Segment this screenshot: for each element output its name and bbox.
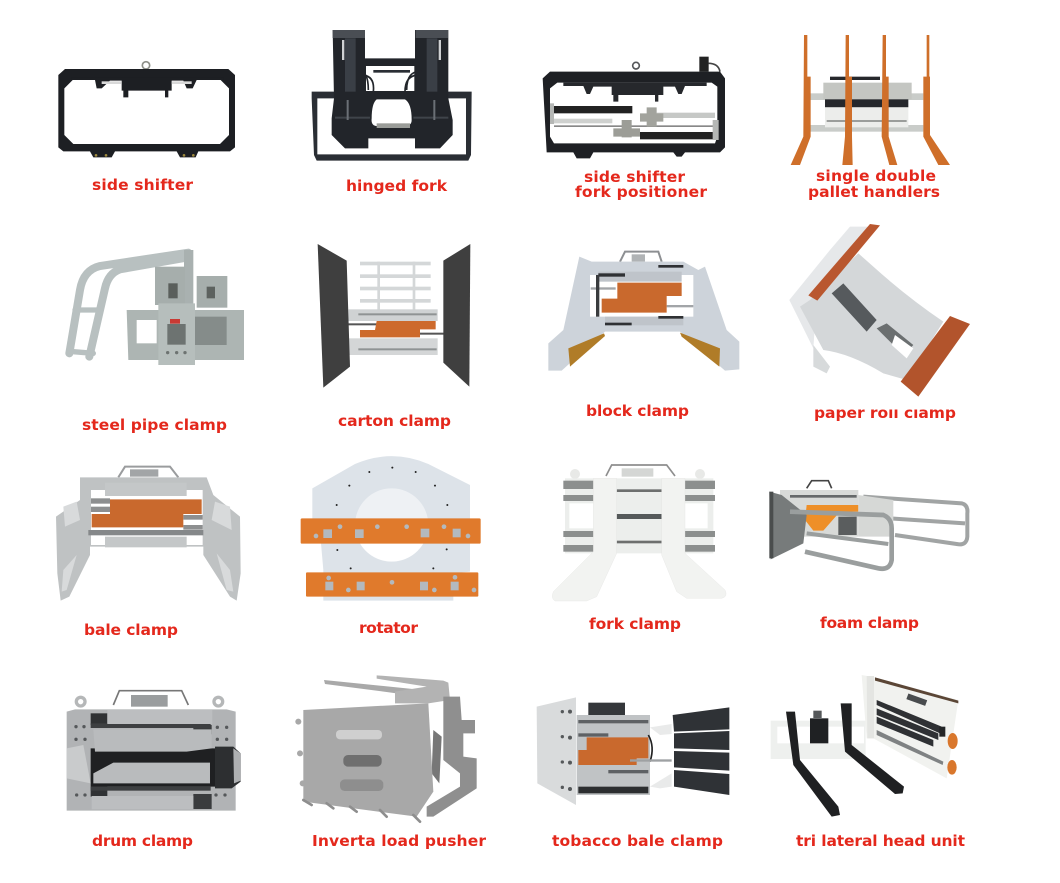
- label: hinged fork: hinged fork: [346, 177, 448, 195]
- label: steel pipe clamp: steel pipe clamp: [82, 416, 227, 434]
- panel: steel pipe clamp: [69, 250, 244, 434]
- image: drum clamp: [67, 691, 241, 811]
- panel: paper roll clamp: [789, 224, 970, 422]
- label: drum clamp: drum clamp: [92, 832, 193, 850]
- label: carton clamp: carton clamp: [338, 412, 451, 430]
- panel: side shifter fork positioner: [543, 57, 725, 201]
- image: hinged fork: [312, 30, 472, 161]
- image: fork clamp: [552, 465, 726, 601]
- label: Inverta load pusher: Inverta load pusher: [312, 832, 486, 850]
- label: tobacco bale clamp: tobacco bale clamp: [552, 832, 723, 850]
- image: paper roll clamp: [789, 224, 970, 397]
- label: fork clamp: fork clamp: [589, 615, 681, 633]
- panel: rotator: [301, 456, 481, 637]
- label: side shifter fork positioner (two lines): fork positioner: [575, 183, 707, 201]
- label: tri lateral head unit: tri lateral head unit: [796, 832, 966, 850]
- panel: Inverta load pusher: [295, 675, 486, 850]
- image: Inverta load pusher: [295, 675, 477, 822]
- image: tobacco bale clamp: [537, 697, 729, 805]
- image: bale clamp: [56, 467, 241, 601]
- panel: side shifter: [58, 62, 235, 194]
- label: foam clamp: foam clamp: [820, 614, 919, 632]
- image: rotator: [301, 456, 481, 601]
- label: single double pallet handlers (two lines): single double: [816, 167, 936, 185]
- label: single double pallet handlers (two lines): [808, 167, 940, 201]
- panel: hinged fork: [312, 30, 472, 195]
- panel: tri lateral head unit: [771, 675, 966, 850]
- label: side shifter: side shifter: [92, 176, 193, 194]
- label: side shifter fork positioner (two lines): side shifter: [584, 168, 685, 186]
- panel: tobacco bale clamp: [537, 697, 729, 850]
- label: paper roll clamp: paper roıı cıamp: [814, 404, 956, 422]
- label: single double pallet handlers (two lines): pallet handlers: [808, 183, 940, 201]
- image: side shifter with fork positioner: [543, 57, 725, 158]
- panel: drum clamp: [67, 691, 241, 850]
- image: side shifter frame: [58, 62, 235, 157]
- label: block clamp: block clamp: [586, 402, 689, 420]
- image: pallet handler: [791, 35, 950, 165]
- label: side shifter fork positioner (two lines): [575, 168, 707, 201]
- image: foam clamp: [769, 481, 967, 569]
- panel: carton clamp: [318, 244, 470, 430]
- panel: bale clamp: [56, 467, 241, 639]
- image: steel pipe clamp: [69, 250, 244, 365]
- image: carton clamp: [318, 244, 470, 388]
- label: bale clamp: bale clamp: [84, 621, 178, 639]
- panel: block clamp: [548, 252, 739, 420]
- image: block clamp: [548, 252, 739, 371]
- panel: single double pallet handlers: [791, 35, 950, 201]
- panel: fork clamp: [552, 465, 726, 633]
- panel: foam clamp: [769, 481, 967, 632]
- label: rotator: rotator: [359, 619, 418, 637]
- image: tri lateral head unit: [771, 675, 958, 817]
